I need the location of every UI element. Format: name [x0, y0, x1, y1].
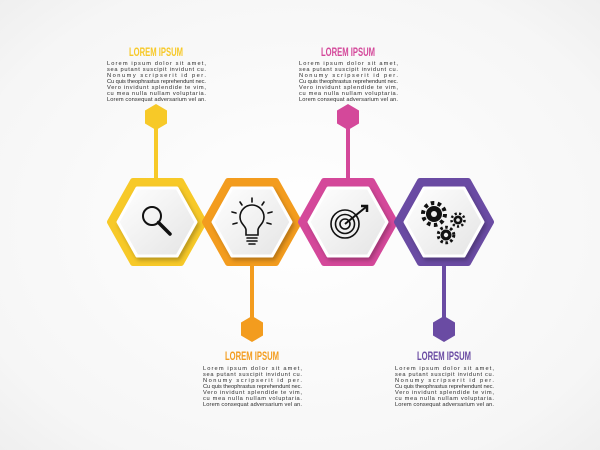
text block: step 3: Lorem ipsum dolor sit amet,: [299, 61, 398, 67]
icon: gears: [423, 203, 464, 243]
text block: step 4: Nonumy scripserit id per.: [395, 378, 494, 384]
connector: step 1: [145, 104, 167, 183]
text block: step 1: LOREM IPSUM: [129, 45, 183, 59]
hexagon: step 3 target: [301, 181, 395, 263]
text block: step 1: Nonumy scripserit id per.: [107, 73, 206, 79]
text block: step 3: Vero invidunt splendide te vim,: [299, 85, 398, 91]
text block: step 1: Lorem ipsum dolor sit amet,: [107, 61, 206, 67]
text block: step 2: sea putant suscipit invidunt cu.: [203, 372, 302, 378]
hexagon: step 2 idea: [205, 181, 299, 263]
text block: step 3: sea putant suscipit invidunt cu.: [299, 67, 398, 73]
text block: step 3: Lorem consequat adversarium vel an.: [299, 97, 398, 103]
text block: step 4: Cu quis theophrastus reprehendunt nec.: [395, 384, 494, 390]
text block: step 3: [299, 45, 398, 103]
text block: step 3: Cu quis theophrastus reprehendunt nec.: [299, 79, 398, 85]
text block: step 2: Lorem ipsum dolor sit amet,: [203, 366, 302, 372]
text block: step 2: cu mea nulla nullam voluptaria.: [203, 396, 302, 402]
hexagon: step 1 search: [110, 181, 204, 263]
text block: step 4: Vero invidunt splendide te vim,: [395, 390, 494, 396]
text block: step 1: sea putant suscipit invidunt cu.: [107, 67, 206, 73]
text block: step 1: [107, 45, 206, 103]
text block: step 3: cu mea nulla nullam voluptaria.: [299, 91, 398, 97]
connector: step 3: [337, 104, 359, 183]
text block: step 4: LOREM IPSUM: [417, 349, 471, 363]
text block: step 2: [203, 349, 302, 408]
text block: step 3: Nonumy scripserit id per.: [299, 73, 398, 79]
icon: target: [331, 206, 367, 238]
text block: step 2: LOREM IPSUM: [225, 349, 279, 363]
text block: step 2: Lorem consequat adversarium vel an.: [203, 402, 302, 408]
text block: step 2: Nonumy scripserit id per.: [203, 378, 302, 384]
text block: step 4: cu mea nulla nullam voluptaria.: [395, 396, 494, 402]
text block: step 1: Lorem consequat adversarium vel an.: [107, 97, 206, 103]
connector: step 2: [241, 262, 263, 342]
icon: magnifier: [143, 207, 170, 234]
text block: step 4: Lorem ipsum dolor sit amet,: [395, 366, 494, 372]
text block: step 1: Cu quis theophrastus reprehendunt nec.: [107, 79, 206, 85]
text block: step 3: LOREM IPSUM: [321, 45, 375, 59]
connector: step 4: [433, 262, 455, 342]
text block: step 1: cu mea nulla nullam voluptaria.: [107, 91, 206, 97]
text block: step 2: Vero invidunt splendide te vim,: [203, 390, 302, 396]
text block: step 4: [395, 349, 494, 408]
text block: step 4: Lorem consequat adversarium vel an.: [395, 402, 494, 408]
icon: light bulb: [232, 198, 272, 244]
hexagon: step 4 gears: [397, 181, 491, 263]
text block: step 4: sea putant suscipit invidunt cu.: [395, 372, 494, 378]
text block: step 1: Vero invidunt splendide te vim,: [107, 85, 206, 91]
text block: step 2: Cu quis theophrastus reprehendunt nec.: [203, 384, 302, 390]
